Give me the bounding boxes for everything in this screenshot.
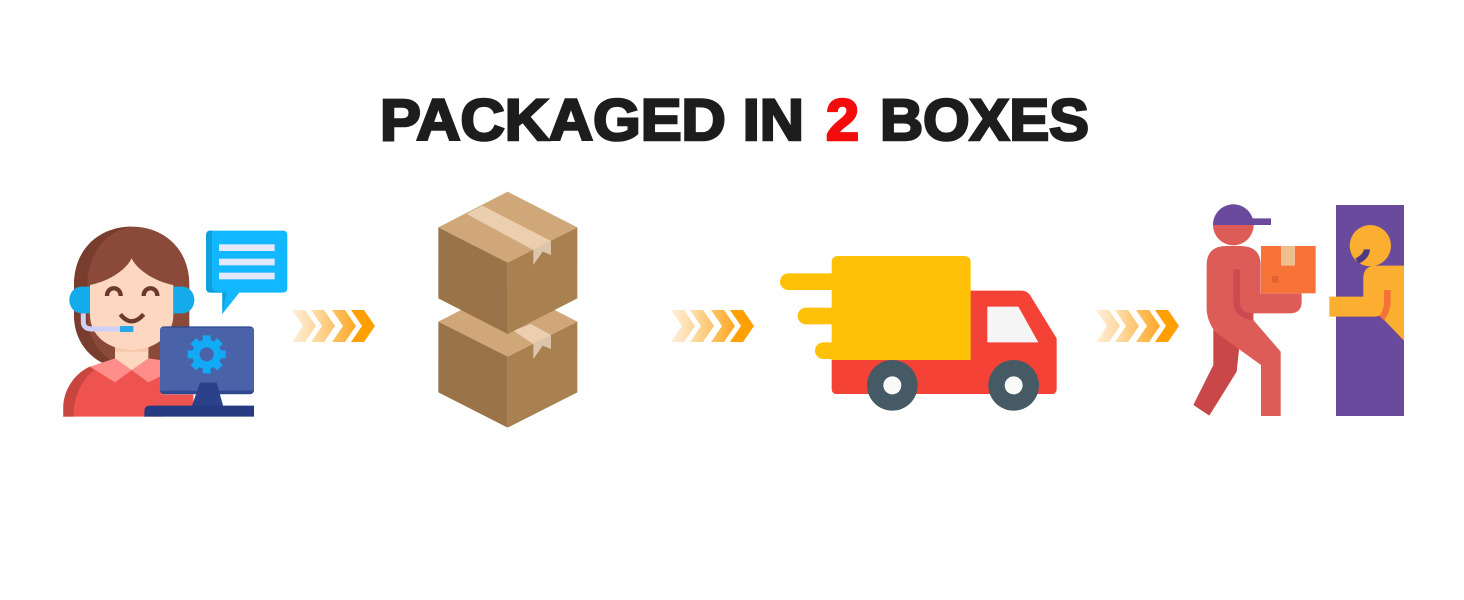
arrow: step 3 to 4 [1096, 310, 1179, 342]
title: PACKAGED IN [380, 88, 804, 153]
recipient [1329, 225, 1404, 341]
speech bubble [206, 231, 287, 314]
title [380, 88, 1089, 153]
upper box [438, 192, 577, 334]
parcel [1261, 246, 1316, 293]
courier [1193, 204, 1302, 416]
door [1336, 205, 1404, 416]
title: BOXES [880, 88, 1089, 153]
icon: courier handing parcel at door [1193, 204, 1404, 416]
title: 2 [826, 88, 859, 153]
icon: two stacked cardboard boxes [438, 192, 577, 428]
monitor [144, 326, 254, 417]
icon: delivery truck [780, 256, 1057, 411]
arrow: step 2 to 3 [671, 310, 754, 342]
arrow: step 1 to 2 [292, 310, 375, 342]
icon: customer support agent [63, 227, 287, 417]
lower box [438, 286, 577, 428]
